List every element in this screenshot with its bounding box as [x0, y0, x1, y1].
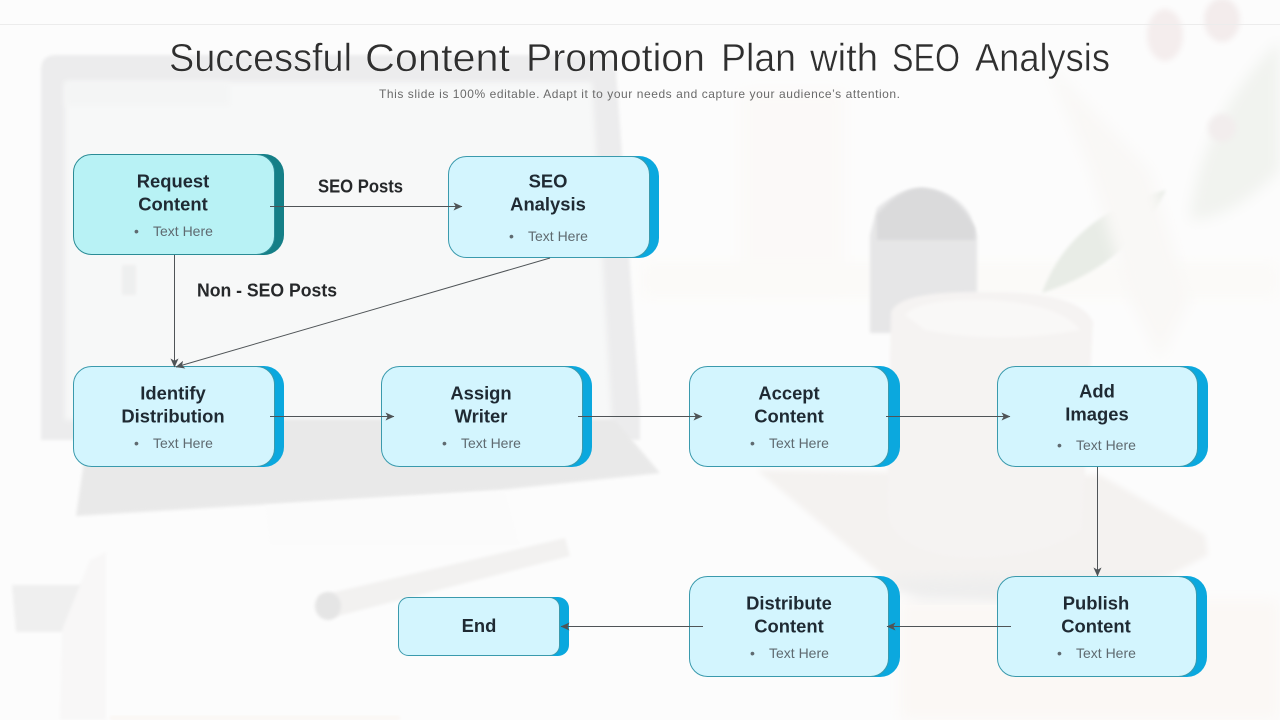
card: Identify Distribution: Text Here	[153, 435, 213, 451]
card: End: End	[462, 615, 496, 636]
card: Assign Writer: Assign	[450, 382, 512, 404]
card: SEO Analysis: •	[509, 228, 514, 244]
card: Request Content	[74, 154, 284, 255]
card: Add Images: Images	[1065, 404, 1129, 424]
card: Distribute Content	[690, 576, 900, 677]
card: Accept Content: Content	[754, 406, 824, 426]
title: SEO	[892, 37, 960, 80]
card: Request Content: •	[134, 223, 139, 239]
title: Successful	[169, 37, 352, 80]
card: Publish Content: Publish	[1063, 592, 1129, 614]
card: Distribute Content: Text Here	[769, 645, 829, 661]
card: Assign Writer: Writer	[455, 406, 507, 426]
card: Assign Writer: •	[442, 435, 447, 451]
card: Accept Content	[690, 366, 900, 467]
card: Accept Content: •	[750, 435, 755, 451]
card: Distribute Content: Content	[754, 616, 824, 636]
title: Content	[365, 37, 510, 80]
subtitle: This slide is 100% editable. Adapt it to your needs and capture your audience’s attention.	[379, 87, 900, 101]
arrow: Publish Content to Distribute Content	[887, 626, 1011, 628]
title: Analysis	[975, 37, 1110, 80]
card: End	[398, 597, 569, 656]
card: Publish Content: Text Here	[1076, 645, 1136, 661]
card: Add Images: Text Here	[1076, 437, 1136, 453]
card: Assign Writer: Text Here	[461, 435, 521, 451]
card: Identify Distribution: Distribution	[121, 406, 225, 426]
label: SEO Posts: SEO Posts	[318, 176, 403, 196]
card: Publish Content	[998, 576, 1207, 677]
card: Add Images: •	[1057, 437, 1062, 453]
card: Request Content: Content	[138, 194, 208, 214]
card: SEO Analysis	[448, 156, 659, 258]
card: Accept Content: Text Here	[769, 435, 829, 451]
card: Add Images	[998, 366, 1208, 467]
card: Assign Writer	[382, 366, 592, 467]
arrow: Distribute Content to End	[561, 626, 703, 628]
title: with	[809, 37, 878, 80]
title: Plan	[721, 37, 796, 80]
title: Promotion	[526, 37, 705, 80]
card: Distribute Content: •	[750, 645, 755, 661]
card: Accept Content: Accept	[758, 382, 820, 404]
card: SEO Analysis: Analysis	[510, 194, 586, 214]
arrow: Add Images to Publish Content	[1096, 467, 1098, 576]
card: Distribute Content: Distribute	[746, 592, 832, 614]
arrow: SEO Analysis to Identify Distribution	[176, 258, 550, 367]
arrow: Identify Distribution to Assign Writer	[270, 416, 394, 418]
card: Identify Distribution: •	[134, 435, 139, 451]
card: SEO Analysis: Text Here	[528, 228, 588, 244]
card: Request Content: Text Here	[153, 223, 213, 239]
card: Publish Content: •	[1057, 645, 1062, 661]
arrow: Request Content to Identify Distribution	[174, 255, 176, 367]
card: Identify Distribution	[74, 366, 284, 467]
arrow: Assign Writer to Accept Content	[578, 416, 702, 418]
label: Non - SEO Posts: Non - SEO Posts	[197, 280, 337, 300]
arrow: Request Content to SEO Analysis	[270, 206, 462, 208]
card: Request Content: Request	[137, 170, 209, 192]
card: Add Images: Add	[1079, 380, 1115, 402]
card: SEO Analysis: SEO	[529, 170, 567, 192]
top divider line	[0, 24, 1280, 25]
card: Identify Distribution: Identify	[140, 382, 206, 404]
card: Publish Content: Content	[1061, 616, 1131, 636]
arrow: Accept Content to Add Images	[886, 416, 1010, 418]
